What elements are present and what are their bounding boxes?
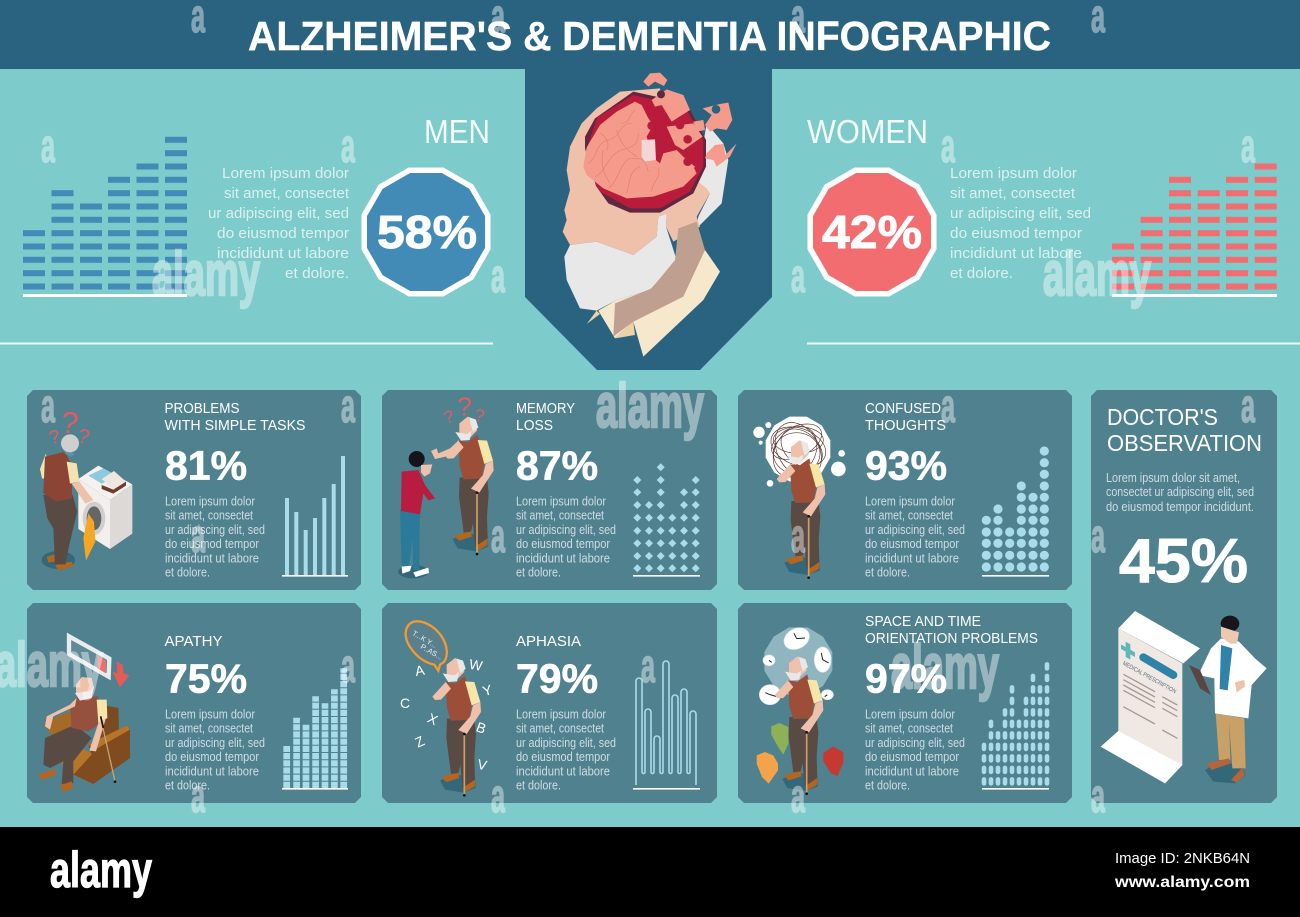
description: ur adipiscing elit, sed (865, 523, 965, 537)
panel: brain pennant (525, 69, 772, 370)
text block: women description: ur adipiscing elit, sed (950, 205, 1091, 222)
description: Lorem ipsum dolor (516, 708, 606, 722)
watermarks: alamy (596, 372, 704, 441)
description: do eiusmod tempor incididunt. (1106, 500, 1254, 514)
heading: women: WOMEN (807, 113, 928, 150)
footer bar (0, 827, 1300, 917)
description: Lorem ipsum dolor sit amet, (1106, 471, 1240, 485)
text block: men description: do eiusmod tempor (217, 225, 349, 242)
dot chart (982, 446, 1049, 577)
icons: question marks: ? (457, 392, 472, 422)
illustration: man at washing machine (40, 405, 132, 570)
watermarks: a (1091, 509, 1105, 562)
watermarks: a (791, 509, 805, 562)
text block: women description (950, 165, 1091, 282)
watermarks: a (341, 119, 355, 172)
icons: question marks: ? (59, 405, 80, 441)
description: incididunt ut labore (516, 551, 610, 565)
text block: women description: do eiusmod tempor (950, 225, 1082, 242)
percentage: 79% (516, 656, 598, 702)
illustration: man in armchair (38, 636, 130, 792)
stat badge: men 58% (364, 170, 488, 294)
footer image id: Image ID: 2NKB64N (1115, 850, 1250, 867)
description: et dolore. (865, 566, 910, 580)
description (165, 708, 265, 792)
panel heading: ORIENTATION PROBLEMS (865, 631, 1038, 647)
watermarks: alamy (891, 633, 999, 702)
line chart (633, 661, 700, 790)
illustration: man with scattered letters: A (414, 662, 426, 679)
description: sit amet, consectet (165, 509, 253, 523)
illustration: man with scattered letters: V (476, 756, 489, 774)
text block: women description: incididunt ut labore (950, 245, 1082, 262)
title: ALZHEIMER'S & DEMENTIA INFOGRAPHIC (248, 13, 1051, 59)
description: do eiusmod tempor (165, 750, 259, 764)
illustration: man with scattered letters: Y (481, 681, 494, 699)
watermarks: a (941, 379, 955, 432)
stat badge: women 42% (810, 170, 934, 294)
watermarks: a (41, 379, 55, 432)
text block: men description: Lorem ipsum dolor (222, 165, 349, 182)
description: Lorem ipsum dolor (165, 494, 255, 508)
watermarks: a (491, 249, 505, 302)
panel heading: LOSS (516, 418, 553, 434)
description: ur adipiscing elit, sed (865, 736, 965, 750)
description: Lorem ipsum dolor (865, 494, 955, 508)
description: et dolore. (165, 778, 210, 792)
panel heading: THOUGHTS (865, 418, 946, 434)
percentage: 93% (865, 442, 947, 488)
header banner (0, 0, 1300, 69)
description: incididunt ut labore (165, 551, 259, 565)
percentage: 87% (516, 442, 598, 488)
illustration: man with scattered letters (400, 621, 494, 797)
watermarks: a (1091, 769, 1105, 822)
heading: men: MEN (424, 113, 490, 150)
percentage: 45% (1119, 527, 1248, 596)
percentage: 75% (165, 656, 247, 702)
watermarks: a (1241, 119, 1255, 172)
panel heading: OBSERVATION (1107, 430, 1262, 456)
watermarks: a (41, 119, 55, 172)
illustration: man with scribbled thoughts (753, 414, 846, 579)
stat badge: women 42%: 42% (822, 206, 922, 258)
illustration: doctor with prescription (1101, 611, 1267, 783)
footer logo: alamy (50, 842, 152, 898)
panel heading: DOCTOR'S (1107, 404, 1218, 430)
panel heading (164, 401, 306, 434)
illustration: man with scattered letters: C (400, 695, 410, 711)
illustration: man with scattered letters: W (468, 656, 485, 674)
watermarks: a (941, 119, 955, 172)
icons: question marks: ? (473, 404, 487, 426)
icons: question marks: ? (47, 427, 62, 449)
text block: men description: sit amet, consectet (224, 185, 350, 202)
percentage: 97% (865, 656, 947, 702)
description: et dolore. (165, 566, 210, 580)
icon: head with puzzle brain (563, 73, 737, 357)
text block: men description: ur adipiscing elit, sed (208, 205, 349, 222)
panel heading (865, 401, 946, 434)
description: do eiusmod tempor (865, 537, 959, 551)
watermarks: a (341, 379, 355, 432)
description: sit amet, consectet (165, 722, 253, 736)
description (516, 494, 616, 580)
description: sit amet, consectet (516, 722, 604, 736)
description: ur adipiscing elit, sed (165, 736, 265, 750)
panel heading: SPACE AND TIME (865, 614, 981, 630)
panel heading (865, 614, 1038, 647)
description: consectet ur adipiscing elit, sed (1106, 485, 1254, 499)
panel: space and time orientation problems (738, 603, 1072, 803)
description: Lorem ipsum dolor (165, 708, 255, 722)
panel heading: APHASIA (516, 634, 581, 650)
description: incididunt ut labore (165, 764, 259, 778)
percentage: 81% (165, 442, 247, 488)
chart: women bar chart (1112, 164, 1277, 297)
description: et dolore. (516, 778, 561, 792)
description (865, 494, 965, 580)
description (516, 708, 616, 792)
watermarks: alamy (152, 240, 260, 309)
description: Lorem ipsum dolor (516, 494, 606, 508)
description: ur adipiscing elit, sed (165, 523, 265, 537)
panel: apathy (27, 603, 361, 803)
description: et dolore. (516, 566, 561, 580)
watermarks: alamy (1043, 240, 1151, 309)
watermarks: a (491, 509, 505, 562)
description (865, 708, 965, 792)
description: do eiusmod tempor (865, 750, 959, 764)
icons: question marks (47, 405, 92, 449)
illustration: man with scattered letters: T...K Y... (411, 629, 438, 650)
description (1106, 471, 1254, 514)
watermarks: a (641, 639, 655, 692)
illustration: doctor with prescription: MEDICAL PRESCRIPTION (1121, 661, 1177, 695)
description (165, 494, 265, 580)
text block: men description: et dolore. (285, 265, 349, 282)
footer url: www.alamy.com (1114, 874, 1250, 891)
panel heading: MEMORY (516, 401, 575, 417)
icons: question marks (442, 392, 487, 428)
panel heading: APATHY (164, 634, 223, 650)
panel: memory loss (382, 390, 717, 590)
illustration: man with scattered letters: X (425, 710, 441, 729)
watermarks: a (791, 769, 805, 822)
panel heading: PROBLEMS (164, 401, 240, 417)
bar chart (282, 456, 348, 577)
illustration: man with scattered letters: B (474, 719, 488, 737)
description: ur adipiscing elit, sed (516, 523, 616, 537)
watermarks: a (791, 249, 805, 302)
description: do eiusmod tempor (165, 537, 259, 551)
watermarks: a (191, 769, 205, 822)
description: do eiusmod tempor (516, 750, 610, 764)
description: et dolore. (865, 778, 910, 792)
description: sit amet, consectet (865, 509, 953, 523)
description: incididunt ut labore (865, 764, 959, 778)
panel heading (516, 401, 575, 434)
panel heading: WITH SIMPLE TASKS (164, 418, 306, 434)
description: incididunt ut labore (865, 551, 959, 565)
icons: question marks: ? (442, 406, 456, 428)
description: do eiusmod tempor (516, 537, 610, 551)
illustration: man with scattered letters: Z (412, 732, 427, 751)
description: Lorem ipsum dolor (865, 708, 955, 722)
pill chart (984, 664, 1047, 783)
illustration: man with scattered letters: P..AS... (419, 642, 444, 662)
stat badge: men 58%: 58% (377, 206, 477, 258)
text block: women description: sit amet, consectet (950, 185, 1076, 202)
watermarks: a (191, 509, 205, 562)
description: ur adipiscing elit, sed (516, 736, 616, 750)
panel: doctor's observation (1091, 390, 1277, 803)
text block: men description (208, 165, 350, 282)
panel: confused thoughts (738, 390, 1072, 590)
watermarks: a (341, 639, 355, 692)
watermarks: a (491, 769, 505, 822)
panel: problems with simple tasks (27, 390, 361, 590)
description: sit amet, consectet (516, 509, 604, 523)
watermarks: alamy (0, 631, 103, 700)
illustration: man with clocks and map pins (757, 624, 843, 795)
panel heading: CONFUSED (865, 401, 941, 417)
segmented bar chart (287, 668, 344, 788)
text block: women description: et dolore. (950, 265, 1013, 282)
panel: aphasia (382, 603, 717, 803)
description: incididunt ut labore (516, 764, 610, 778)
panel heading (1107, 404, 1262, 456)
watermarks: a (1241, 379, 1255, 432)
description: sit amet, consectet (865, 722, 953, 736)
diamond chart (633, 463, 700, 577)
chart: men bar chart (23, 137, 187, 297)
text block: women description: Lorem ipsum dolor (950, 165, 1077, 182)
icons: question marks: ? (76, 425, 92, 449)
text block: men description: incididunt ut labore (217, 245, 349, 262)
illustration: man and woman talking (398, 392, 494, 578)
